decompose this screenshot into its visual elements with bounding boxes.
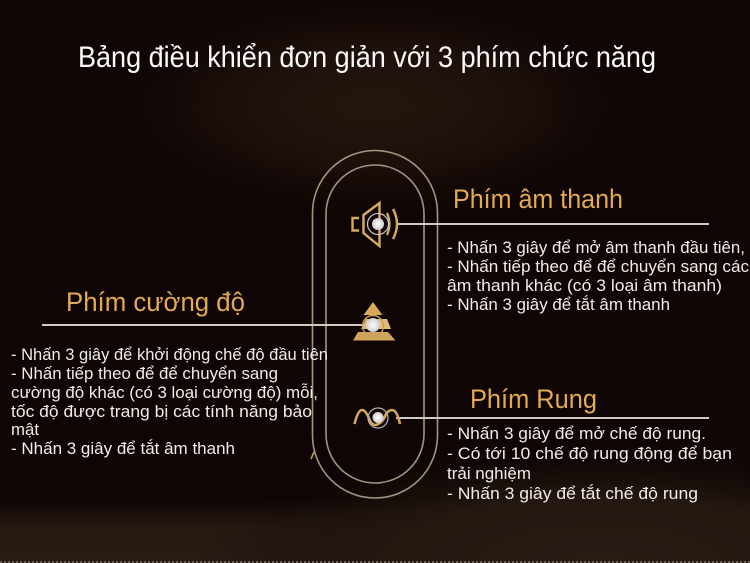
title: Bảng điều khiển đơn giản với 3 phím chức năng bbox=[78, 41, 656, 74]
text block: sound key bbox=[447, 238, 749, 314]
text block: intensity key: - Nhấn 3 giây để khởi động chế độ đầu tiên bbox=[11, 345, 328, 364]
text block: intensity key bbox=[11, 345, 328, 458]
text block: vibration key: trải nghiệm bbox=[447, 464, 531, 483]
heading: intensity key: Phím cường độ bbox=[66, 287, 245, 317]
text block: sound key: - Nhấn tiếp theo để để chuyển sang các bbox=[447, 257, 749, 276]
icon: vibration wave bbox=[354, 408, 400, 428]
connector line: intensity key bbox=[42, 324, 368, 326]
heading: vibration key: Phím Rung bbox=[470, 384, 597, 414]
text block: sound key: âm thanh khác (có 3 loại âm thanh) bbox=[447, 276, 722, 295]
heading: sound key: Phím âm thanh bbox=[453, 184, 623, 214]
text block: vibration key: - Nhấn 3 giây để mở chế độ rung. bbox=[447, 424, 706, 443]
control panel capsule bbox=[311, 150, 438, 498]
text block: vibration key bbox=[447, 424, 732, 503]
text block: intensity key: - Nhấn 3 giây để tắt âm thanh bbox=[11, 439, 235, 458]
icon: pyramid bbox=[353, 302, 396, 340]
text block: sound key: - Nhấn 3 giây để mở âm thanh đầu tiên, bbox=[447, 238, 745, 257]
text block: vibration key: - Có tới 10 chế độ rung động để bạn bbox=[447, 444, 732, 463]
connector line: sound key bbox=[397, 223, 709, 225]
text block: vibration key: - Nhấn 3 giây để tắt chế độ rung bbox=[447, 484, 698, 503]
text block: sound key: - Nhấn 3 giây để tắt âm thanh bbox=[447, 295, 670, 314]
text block: intensity key: cường độ khác (có 3 loại cường độ) mỗi, bbox=[11, 383, 318, 402]
icon: speaker bbox=[352, 203, 397, 246]
text block: intensity key: tốc độ được trang bị các tính năng bảo bbox=[11, 402, 312, 421]
text block: intensity key: - Nhấn tiếp theo để để chuyển sang bbox=[11, 364, 278, 383]
connector line: vibration key bbox=[396, 417, 709, 419]
text block: intensity key: mật bbox=[11, 420, 39, 439]
